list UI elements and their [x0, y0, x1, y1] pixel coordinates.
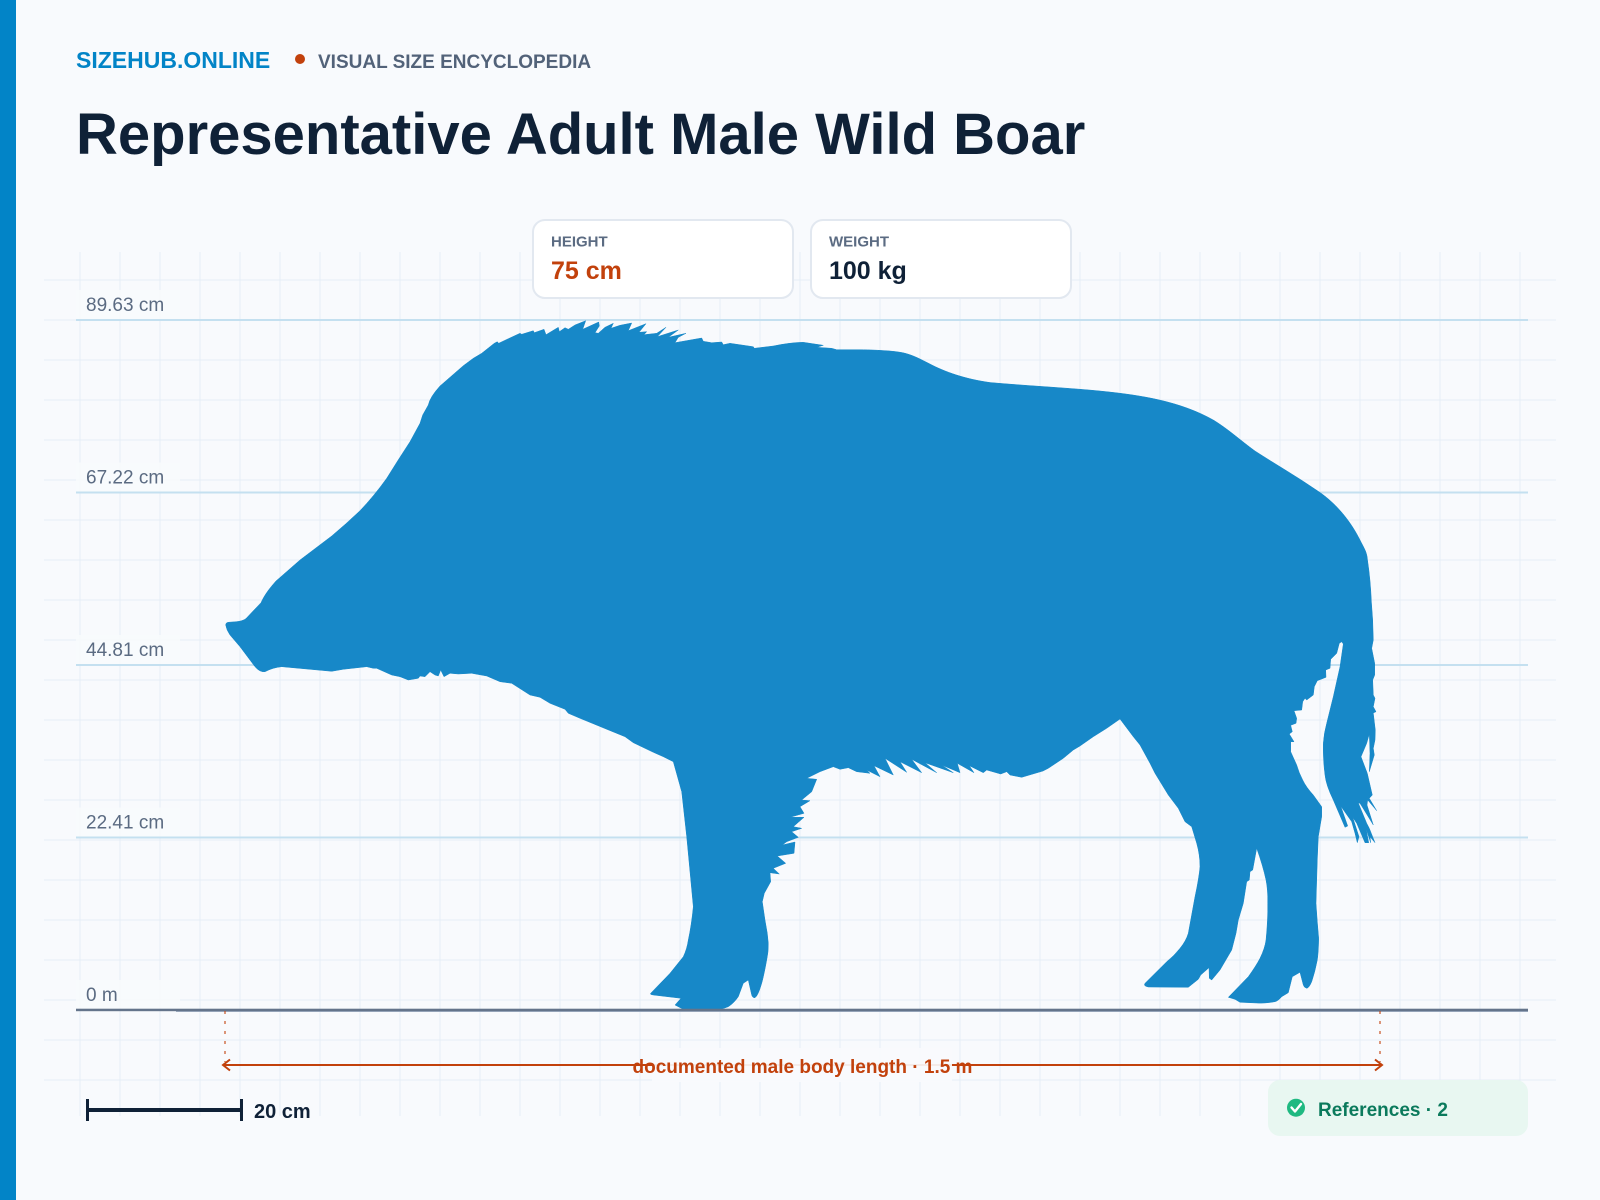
brand header: SIZEHUB.ONLINE — [76, 47, 270, 73]
scale bar: 20 cm — [254, 1101, 311, 1123]
axis label: 89.63 cm: 89.63 cm — [86, 295, 164, 316]
axis label: 89.63 cm — [76, 290, 180, 319]
axis label: 67.22 cm — [76, 462, 180, 492]
scale bar — [87, 1099, 311, 1123]
ground line — [76, 1009, 1528, 1012]
axis label: 67.22 cm: 67.22 cm — [86, 468, 164, 488]
height reference lines — [76, 319, 1528, 838]
body length dimension: documented male body length · 1.5 m — [633, 1057, 972, 1078]
boar silhouette — [226, 321, 1377, 1009]
axis label: 22.41 cm — [76, 808, 180, 836]
axis label: 44.81 cm: 44.81 cm — [86, 640, 164, 661]
brand header: VISUAL SIZE ENCYCLOPEDIA — [318, 52, 591, 73]
axis label: 44.81 cm — [76, 635, 180, 664]
stat card: height: HEIGHT — [551, 234, 608, 250]
axis label: 22.41 cm: 22.41 cm — [86, 812, 164, 834]
stat card: weight: WEIGHT — [829, 234, 889, 250]
axis label: 0 m — [76, 980, 180, 1008]
stat card: weight: 100 kg — [829, 257, 907, 285]
left accent bar — [0, 0, 16, 1200]
title: Representative Adult Male Wild Boar — [76, 102, 1085, 167]
stat card: height: 75 cm — [551, 257, 622, 285]
stat card: weight — [811, 220, 1071, 298]
references badge: References · 2 — [1318, 1100, 1448, 1121]
stat card: height — [533, 220, 793, 298]
body length dimension — [223, 1011, 1382, 1082]
brand header — [76, 47, 591, 73]
references badge — [1268, 1080, 1528, 1136]
axis label: 0 m: 0 m — [86, 985, 118, 1006]
